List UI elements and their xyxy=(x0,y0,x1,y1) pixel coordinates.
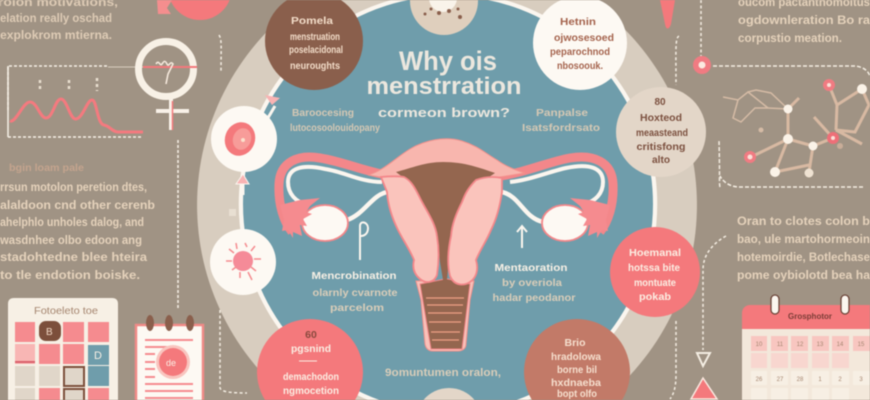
top left text block: explokrom mtierna. xyxy=(0,28,112,42)
left calendar panel xyxy=(8,298,118,400)
right mid text block: bao, ule martohormeoin xyxy=(737,232,870,246)
right dotted arrow xyxy=(697,236,726,366)
molecule diagram xyxy=(719,79,869,187)
left mid text block: wasdnhee olbo edoon ang xyxy=(0,233,142,247)
node: brown bottom right: hradolowa xyxy=(551,351,601,363)
node: brown top left: poselacidonal xyxy=(289,45,343,56)
caption right of uterus xyxy=(492,263,576,304)
top left text block: elation really oschad xyxy=(0,11,112,25)
node: coral bottom left: demachodon xyxy=(283,371,339,383)
caption right of uterus: hadar peodanor xyxy=(492,293,576,304)
right calendar panel: Grosphotor xyxy=(788,312,832,321)
title: menstrration xyxy=(366,73,522,100)
notebook panel xyxy=(136,315,203,400)
left inner lobe xyxy=(381,176,438,282)
right calendar panel: 27 xyxy=(777,377,784,383)
title: cormeon brown? xyxy=(378,105,510,120)
right calendar panel xyxy=(742,295,870,400)
uterine cavity xyxy=(396,162,495,280)
right mid text block xyxy=(737,214,870,282)
left lower dashed connector xyxy=(220,310,247,393)
node: white egg icon xyxy=(211,95,280,195)
ovarian ligaments xyxy=(347,192,388,220)
node: top beige dotted xyxy=(410,0,478,35)
node: brown bottom right: bopt olfo xyxy=(557,388,597,400)
right inner lobe xyxy=(448,177,502,284)
blue side note right: Isatsfordrsato xyxy=(522,123,600,134)
right calendar panel: 3 xyxy=(859,377,863,383)
node: brown top left: neuroughts xyxy=(290,61,340,72)
right mid text block: Oran to clotes colon b xyxy=(737,214,870,228)
blue side note left: Baroocesing xyxy=(292,108,354,119)
node: beige right xyxy=(616,87,706,177)
caption left of uterus: Mencrobination xyxy=(312,271,396,282)
caption below uterus: 9omuntumen oralon, xyxy=(385,367,501,379)
node: coral right: pokab xyxy=(639,291,671,303)
blue side note left: lutocosoolouidopany xyxy=(290,123,380,134)
arrow right xyxy=(517,226,527,248)
right calendar panel: 13 xyxy=(817,342,824,348)
left mid text block xyxy=(0,163,155,282)
left calendar panel: B xyxy=(46,327,53,338)
left mid text block: rrsun motolon peretion dtes, xyxy=(0,180,147,194)
left mid text block: bgin loam pale xyxy=(9,163,84,174)
node: coral bottom left: pgsnind xyxy=(291,343,331,355)
node: beige right: meaasteand xyxy=(636,128,688,139)
top right text block xyxy=(738,0,870,45)
right calendar panel: 14 xyxy=(837,342,844,348)
fallopian tubes xyxy=(279,157,392,232)
node: beige right: Hoxteod xyxy=(640,113,682,124)
node: white sun follicle icon xyxy=(210,229,276,295)
node: coral right xyxy=(610,227,700,317)
node: white top right xyxy=(533,0,627,90)
lower right dotted connector xyxy=(670,321,676,399)
node: brown bottom right xyxy=(524,319,630,400)
left calendar panel: Fotoeleto toe xyxy=(34,306,98,317)
right calendar panel: 11 xyxy=(777,342,784,348)
caption left of uterus xyxy=(312,271,398,314)
node: coral right: Hoemanal xyxy=(629,247,681,259)
node: coral right: hotssa bite xyxy=(628,262,680,274)
node: white top right: peparochnod xyxy=(550,47,610,58)
right calendar panel: 1 xyxy=(818,377,822,383)
caption left of uterus: olarnly cvarnote xyxy=(312,288,398,299)
right calendar panel: 28 xyxy=(797,377,804,383)
small pink flower icon xyxy=(157,0,172,14)
top left coral circle xyxy=(168,0,232,20)
node: brown top left: Pomela xyxy=(291,16,334,27)
blue side note right: Panpalse xyxy=(536,108,589,119)
node: brown bottom right: borne bil xyxy=(557,364,597,376)
female symbol icon xyxy=(108,42,197,130)
uterus fundus xyxy=(368,139,525,177)
ovaries xyxy=(302,205,348,241)
node: coral bottom left: 60 xyxy=(305,329,317,341)
node: beige right: critisfong xyxy=(636,142,686,153)
title xyxy=(366,46,522,120)
left mid text block: ahelphlo unholes dalog, and xyxy=(0,215,144,229)
cervix xyxy=(416,281,474,351)
node: coral bottom left: ngmocetion xyxy=(283,385,339,397)
node: brown bottom right: hxdnaeba xyxy=(551,377,601,389)
right calendar panel: 10 xyxy=(756,342,763,348)
left mid text block: stadohtedne blee hteira xyxy=(0,250,147,264)
right mid text block: pome oybiolotd bea ha xyxy=(737,268,870,282)
node: brown top left: menstruation xyxy=(290,32,340,43)
drop icon bottom right xyxy=(691,378,717,399)
left calendar panel: D xyxy=(94,350,102,362)
node: white top right: ojwosesoed xyxy=(554,33,614,44)
node: beige right: alto xyxy=(652,155,670,166)
central blue disc xyxy=(239,0,657,400)
arrow left xyxy=(360,222,368,260)
blue side note right xyxy=(522,108,600,134)
right calendar panel: 15 xyxy=(858,342,865,348)
node: beige right: 80 xyxy=(654,97,666,108)
node: white top right: nbosoouk. xyxy=(557,61,603,72)
left mid text block: to tle endotion boiske. xyxy=(0,268,140,282)
right calendar panel: 12 xyxy=(797,342,804,348)
title: Why ois xyxy=(399,46,497,76)
top right connector with pin xyxy=(676,0,870,85)
top right text block: ogdownleration Bo ra xyxy=(738,13,870,27)
caption right of uterus: by overiola xyxy=(502,278,562,289)
blue side note left xyxy=(290,108,380,134)
small marker on ring xyxy=(229,209,236,216)
left hormone line chart xyxy=(8,66,178,310)
top right text block: corpustio meation. xyxy=(738,31,842,45)
central beige ring xyxy=(197,0,697,400)
caption left of uterus: parcelom xyxy=(330,303,384,314)
top left text block xyxy=(0,0,118,42)
node: brown bottom right: Brio xyxy=(564,337,586,349)
right calendar panel: 26 xyxy=(756,377,763,383)
left mid text block: alaldoon cnd other cerenb xyxy=(0,198,155,212)
fimbriae xyxy=(280,198,320,238)
node: coral bottom left xyxy=(257,319,363,400)
right calendar panel: 2 xyxy=(838,377,842,383)
uterus diagram xyxy=(279,139,613,351)
notebook panel: de xyxy=(166,358,176,368)
node: white top right: Hetnin xyxy=(560,17,596,28)
dashed connector top left xyxy=(219,35,221,73)
node: coral right: montuate xyxy=(634,277,676,289)
caption right of uterus: Mentaoration xyxy=(494,263,568,274)
node: bottom beige xyxy=(424,388,474,400)
node: brown top left xyxy=(265,0,363,90)
top right drop icon xyxy=(660,0,675,28)
